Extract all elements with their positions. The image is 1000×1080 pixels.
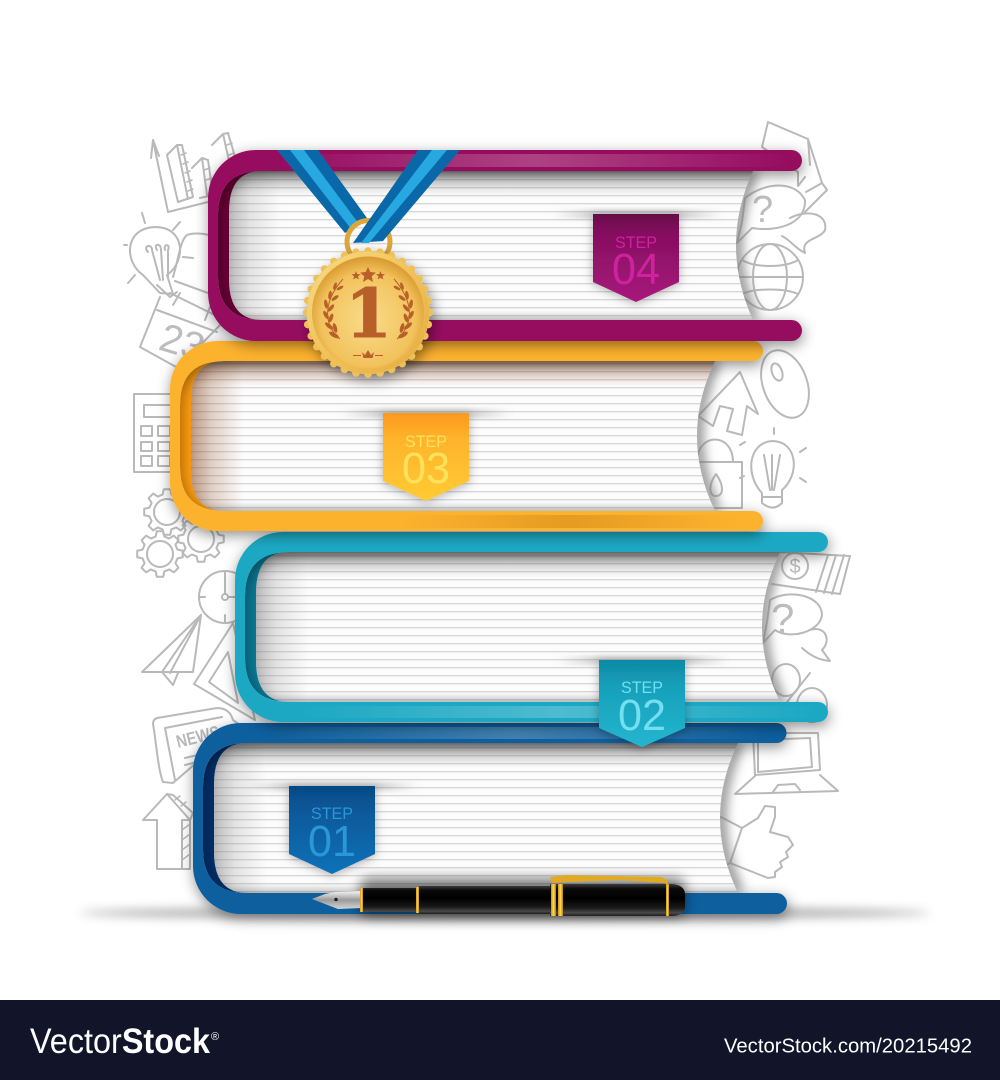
fore-edge shadow	[736, 171, 753, 320]
inner crescent	[180, 361, 240, 511]
step 01 bookmark	[247, 782, 419, 874]
medal disc	[306, 251, 430, 374]
slit shadow	[553, 210, 723, 219]
cover	[208, 150, 802, 341]
medal ring	[347, 220, 390, 264]
step label: STEP	[615, 233, 657, 252]
right ribbon	[353, 150, 460, 243]
pen shadow	[360, 878, 685, 916]
doodle: gears	[137, 489, 224, 577]
fore-edge shadow	[697, 361, 715, 511]
book 2: teal	[235, 532, 828, 722]
ground shadow	[80, 907, 930, 919]
step label: STEP	[621, 678, 663, 697]
doodle: percent	[772, 664, 827, 722]
footer background	[0, 1000, 1000, 1080]
pages	[229, 171, 753, 320]
step number: 02	[618, 691, 666, 740]
image id: VectorStock.com/20215492	[724, 1036, 972, 1058]
footer bar	[0, 1000, 1000, 1080]
cover highlight	[300, 706, 815, 718]
doodle: speech bubbles question	[737, 186, 825, 253]
doodles left column	[124, 133, 255, 869]
cover	[193, 723, 787, 914]
barrel	[361, 886, 550, 914]
crown	[353, 350, 383, 358]
doodle: paper plane	[142, 615, 201, 685]
doodle: thumbs up	[721, 806, 793, 878]
left laurel	[322, 279, 344, 340]
inner crescent	[203, 743, 263, 893]
nib	[312, 891, 362, 909]
step number: 01	[308, 817, 356, 866]
doodle: calendar 23	[140, 293, 225, 371]
logo: VectorStock	[30, 1022, 210, 1061]
doodle: computer mouse	[752, 344, 818, 424]
doodle: set square	[194, 623, 255, 720]
step 04 bookmark	[553, 210, 723, 302]
doodle: newspaper	[153, 708, 240, 783]
ribbon	[383, 413, 469, 501]
cover	[235, 532, 828, 722]
inner crescent	[245, 552, 305, 702]
doodle: newspaper: NEWS	[174, 722, 222, 752]
doodle: money: $	[789, 556, 801, 578]
registered mark: ®	[211, 1031, 219, 1043]
doodle: clock	[199, 571, 251, 623]
doodle: speech bubbles question: ?	[752, 189, 773, 231]
doodle: light bulb left	[124, 213, 180, 297]
centre	[312, 256, 424, 368]
gold bands	[360, 884, 669, 916]
doodle: bar chart	[151, 133, 236, 212]
doodles right column	[697, 122, 850, 878]
scalloped edge	[306, 251, 430, 374]
cover	[170, 341, 763, 531]
fore-edge shadow	[762, 552, 780, 702]
cover shade	[400, 515, 740, 528]
stars	[352, 267, 385, 282]
cover highlight	[260, 727, 770, 739]
inner crescent	[218, 171, 278, 320]
ribbon	[599, 660, 685, 747]
step 03 bookmark	[340, 409, 512, 501]
numeral 1: 1	[345, 274, 392, 353]
doodle: house	[698, 372, 758, 435]
pages	[214, 743, 738, 893]
doodle: calendar 23: 23	[154, 316, 210, 371]
fountain pen	[312, 875, 685, 916]
doodle: padlock	[697, 440, 742, 508]
slit shadow	[340, 409, 512, 418]
doodle: up arrow	[143, 794, 193, 869]
book 4: purple	[208, 150, 802, 341]
step label: STEP	[311, 804, 353, 823]
rim	[307, 252, 429, 374]
nib hole	[334, 898, 338, 901]
left ribbon	[277, 150, 367, 233]
fore-edge shadow	[720, 743, 738, 893]
doodle: laptop	[735, 733, 838, 794]
book 1: blue	[193, 723, 787, 914]
cover highlight	[280, 154, 790, 167]
doodle: tablet	[173, 233, 214, 293]
doodle: calculator	[134, 394, 172, 472]
doodle: light bulb right	[740, 428, 806, 508]
doodle: graduation cap	[762, 122, 827, 212]
right laurel	[393, 279, 415, 340]
ribbon	[289, 786, 375, 874]
doodle: speech bubble question 2	[763, 594, 830, 661]
gold medal	[277, 150, 460, 374]
step number: 04	[612, 245, 660, 294]
cap	[550, 884, 685, 916]
pages	[256, 552, 780, 702]
step number: 03	[402, 444, 450, 493]
ribbon	[593, 214, 679, 302]
step label: STEP	[405, 432, 447, 451]
slit shadow	[557, 656, 729, 665]
doodle: money	[772, 552, 850, 594]
slit shadow	[247, 782, 419, 791]
step 02 bookmark	[557, 656, 729, 747]
doodle: speech bubble question 2: ?	[771, 595, 794, 642]
book 3: orange	[170, 341, 763, 531]
doodle: globe	[737, 244, 803, 310]
gold clip	[550, 875, 669, 887]
pages	[191, 361, 715, 511]
